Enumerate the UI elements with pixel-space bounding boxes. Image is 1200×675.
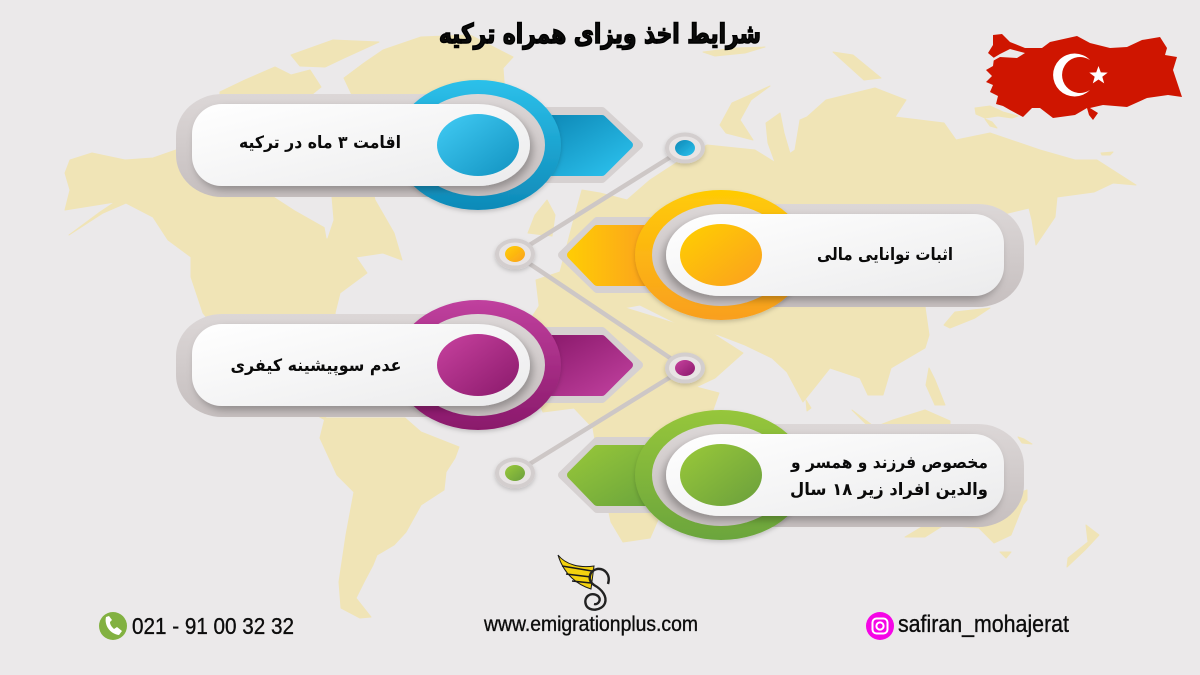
colored ring [635, 190, 807, 320]
arctic islet east [1101, 152, 1113, 155]
phone contact [99, 612, 294, 640]
colored ring [395, 80, 561, 210]
philippines [926, 368, 945, 405]
arrow tag: blue [540, 111, 639, 179]
pill backing [683, 424, 1024, 527]
instagram contact [866, 611, 1069, 640]
pill backing [683, 204, 1024, 307]
label text: اثبات توانایی مالی [817, 245, 953, 265]
canadian arctic island north [291, 40, 379, 67]
colored disc [437, 334, 519, 396]
icon: instagram [866, 612, 894, 640]
instagram handle: safiran_mohajerat [898, 611, 1069, 638]
australia [905, 490, 1027, 543]
panel: green family [562, 410, 1024, 540]
ring inner grey [652, 424, 790, 526]
tasmania [1000, 552, 1011, 558]
continent: africa and arabia [525, 300, 743, 542]
aegean islands [975, 106, 1018, 118]
label text line 1: مخصوص فرزند و همسر و [790, 453, 988, 473]
arrow tag: green [562, 441, 659, 509]
british isles [528, 200, 555, 236]
indonesia [852, 410, 950, 430]
white label pill [192, 104, 530, 186]
new guinea [1018, 437, 1032, 444]
label text: عدم سوپیشینه کیفری [230, 356, 402, 376]
ring inner grey [411, 94, 545, 196]
continent: eurasia [536, 88, 1136, 402]
logo: winged swan [558, 555, 609, 610]
node: blue [667, 134, 703, 162]
colored ring [395, 300, 561, 430]
novaya zemlya [833, 52, 881, 80]
colored disc [680, 224, 762, 286]
arrow tag: purple [540, 331, 639, 399]
pill backing [176, 94, 516, 197]
panel: purple criminal record [176, 300, 639, 430]
world map background [65, 35, 1136, 618]
white label pill [666, 214, 1004, 296]
japan [944, 308, 990, 328]
phone number: 021 - 91 00 32 32 [132, 613, 294, 639]
swan S body [585, 569, 609, 610]
greenland [344, 35, 513, 95]
website: www.emigrationplus.com [483, 613, 698, 636]
continent: south america [320, 418, 459, 618]
scandinavia [720, 86, 770, 140]
white label pill [192, 324, 530, 406]
arrow tag: orange [562, 221, 659, 289]
ural strip [766, 113, 791, 165]
colored disc [680, 444, 762, 506]
panel: blue residency [176, 80, 639, 210]
white label pill [666, 434, 1004, 516]
arctic sliver under title [703, 47, 765, 56]
node: green [497, 460, 533, 486]
ring inner grey [652, 204, 790, 306]
label text line 2: والدین افراد زیر ۱۸ سال [790, 480, 988, 500]
aegean islet south [985, 119, 997, 128]
label text: اقامت ۳ ماه در ترکیه [239, 133, 401, 153]
continent: north america [65, 110, 402, 420]
pill backing [176, 314, 516, 417]
new zealand [1067, 525, 1099, 567]
colored disc [437, 114, 519, 176]
icon: phone [99, 612, 127, 640]
wing [558, 555, 594, 589]
wing feathers [562, 566, 592, 583]
colored ring [635, 410, 807, 540]
ring inner grey [411, 314, 545, 416]
connector lines [515, 148, 685, 473]
turkey flag map [986, 34, 1182, 120]
crescent [1053, 53, 1090, 96]
sri lanka [806, 400, 811, 411]
canadian arctic islands [220, 67, 321, 96]
turkey silhouette [986, 34, 1182, 120]
title: شرایط اخذ ویزای همراه ترکیه [439, 19, 761, 50]
node: purple [667, 354, 703, 382]
star [1089, 66, 1108, 83]
node: orange [497, 240, 533, 268]
marmara sea [990, 49, 1025, 62]
panel: orange financial [562, 190, 1024, 320]
hudson bay cut-out [275, 197, 333, 238]
